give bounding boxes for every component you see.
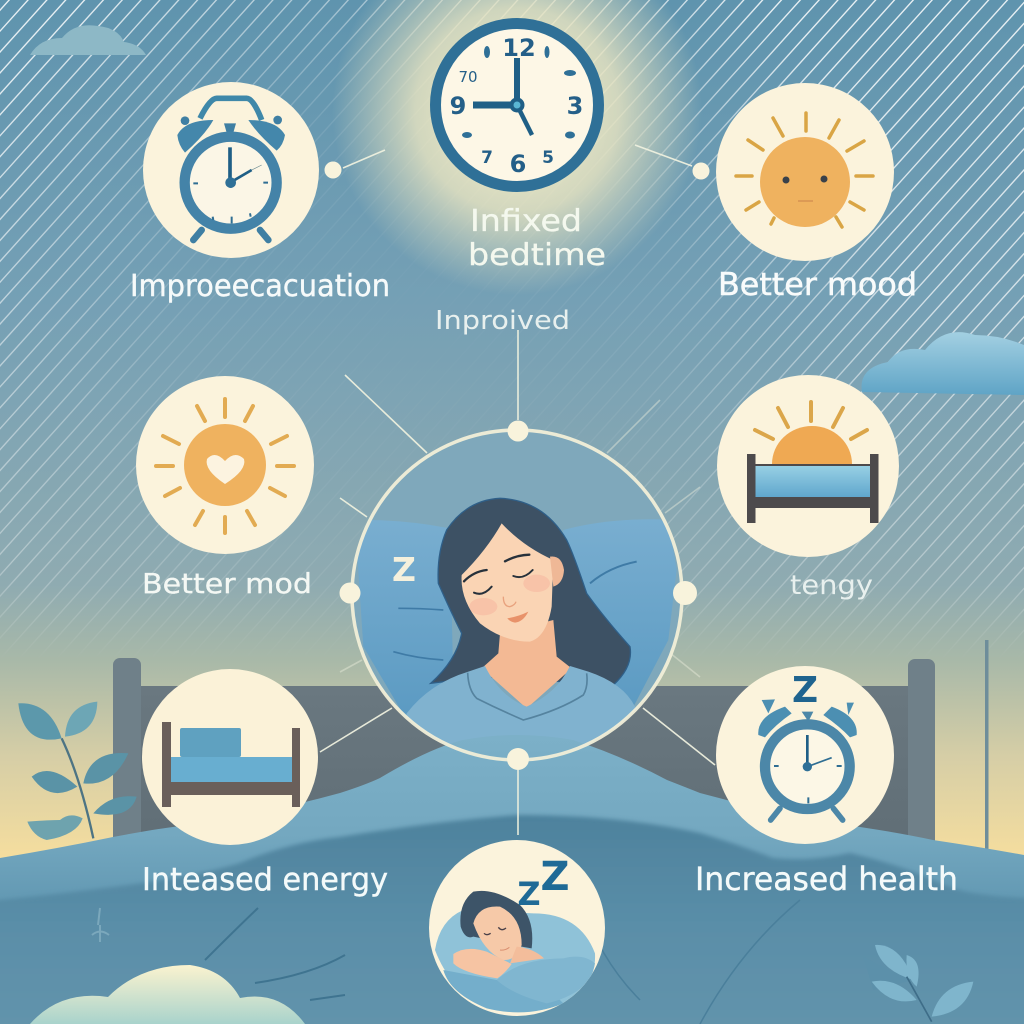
blanket xyxy=(0,735,1024,1024)
icon: bed with rising sun panel xyxy=(717,375,899,557)
label: top-left benefit: Improeecacuation xyxy=(130,269,390,304)
cloud: top left xyxy=(30,25,146,55)
icon: snoozing alarm clock panel: Z xyxy=(792,670,818,711)
letter Z on pillow: Z xyxy=(392,550,416,589)
icon: smiling sun panel xyxy=(716,83,894,261)
cloud: right xyxy=(862,332,1024,395)
icon: wall clock: 70 xyxy=(458,68,478,86)
icon: sun with heart panel xyxy=(136,376,314,554)
icon: wall clock: 6 xyxy=(510,150,526,178)
icon: sleeping person panel: Z xyxy=(540,854,570,900)
icon: wall clock: 12 xyxy=(502,34,536,62)
icon: wall clock: 5 xyxy=(542,148,554,168)
label: better mood (top right): Better mood xyxy=(718,267,917,303)
central illustration: sleeping woman xyxy=(354,437,680,744)
icon: bed panel xyxy=(142,669,318,845)
icon: wall clock xyxy=(436,24,598,186)
icon: alarm clock panel xyxy=(143,82,319,258)
icon: wall clock: 9 xyxy=(450,92,466,120)
icon: wall clock: 7 xyxy=(481,148,493,168)
neck xyxy=(482,620,572,708)
face xyxy=(462,523,553,642)
plant: left xyxy=(18,702,137,840)
label: increased health: Increased health xyxy=(695,860,958,898)
shirt xyxy=(406,666,635,744)
plant: bottom right xyxy=(863,945,973,1022)
label: better mod: Better mod xyxy=(142,567,312,600)
cloud: bottom left xyxy=(30,965,305,1024)
icon: sleeping person panel: Z xyxy=(517,875,541,913)
icon: snoozing alarm clock panel xyxy=(716,666,894,844)
icon: wall clock: 3 xyxy=(567,92,583,120)
heading: infixed bedtime xyxy=(468,204,606,273)
connector lines and nodes xyxy=(320,145,715,835)
label: increased energy (left): Inteased energy xyxy=(142,862,388,898)
headboard xyxy=(113,640,988,865)
icon: sleeping person panel xyxy=(429,840,605,1016)
heading: infixed bedtime: Infixed xyxy=(470,204,582,239)
hair xyxy=(431,498,630,685)
pillows xyxy=(357,519,677,720)
label: energy fragment: tengy xyxy=(790,570,873,601)
heading: infixed bedtime: bedtime xyxy=(468,238,606,273)
label: improved: Inproived xyxy=(435,306,570,336)
